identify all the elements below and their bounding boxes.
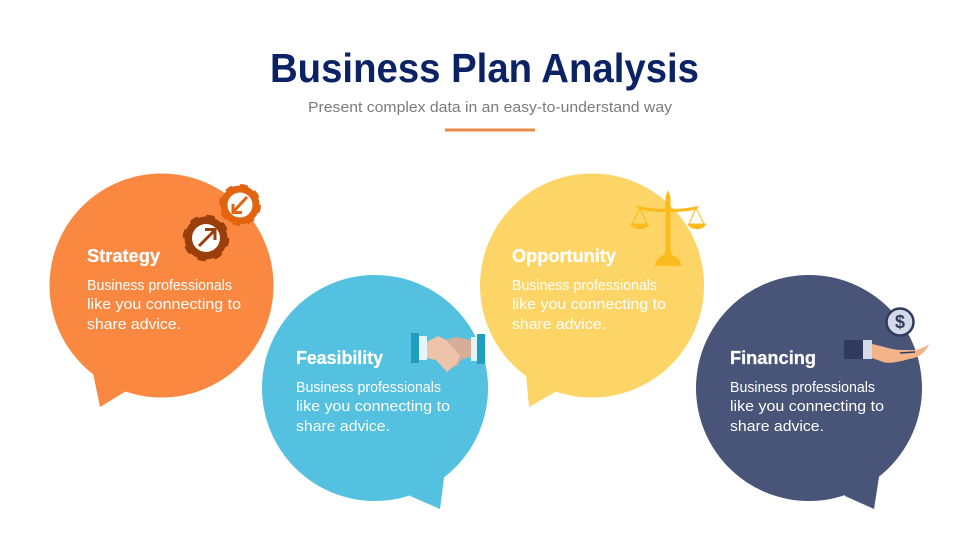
- panel: financing: [696, 275, 929, 509]
- text: strategy: [87, 278, 241, 333]
- icon: hand with coin: [844, 308, 929, 363]
- speech bubble: financing: [696, 275, 922, 509]
- title: Business Plan Analysis: [270, 45, 699, 91]
- text: feasibility: [296, 380, 450, 435]
- text: strategy: share advice.: [87, 317, 181, 333]
- icon: gears: [185, 186, 259, 259]
- text: feasibility: Business professionals: [296, 380, 441, 396]
- icon: hand with coin: $: [895, 312, 905, 332]
- subtitle: Present complex data in an easy-to-understand way: [308, 99, 673, 116]
- text: feasibility: share advice.: [296, 419, 390, 435]
- speech bubble: feasibility: [262, 275, 488, 509]
- text: financing: [730, 380, 884, 435]
- text: opportunity: Business professionals: [512, 278, 657, 294]
- speech bubble: opportunity: [480, 174, 704, 407]
- heading: opportunity: Opportunity: [512, 246, 616, 266]
- title underline: [445, 128, 535, 132]
- panel: feasibility: [262, 275, 488, 509]
- speech bubble: strategy: [50, 174, 274, 407]
- text: strategy: Business professionals: [87, 278, 232, 294]
- text: financing: Business professionals: [730, 380, 875, 396]
- text: opportunity: share advice.: [512, 317, 606, 333]
- heading: strategy: Strategy: [87, 246, 160, 266]
- text: financing: share advice.: [730, 419, 824, 435]
- icon: handshake: [411, 333, 485, 372]
- panel: opportunity: [480, 174, 706, 407]
- text: opportunity: [512, 278, 666, 333]
- heading: feasibility: Feasibility: [296, 348, 383, 368]
- text: strategy: like you connecting to: [87, 297, 241, 313]
- text: feasibility: like you connecting to: [296, 399, 450, 415]
- icon: scales: [630, 190, 706, 266]
- text: opportunity: like you connecting to: [512, 297, 666, 313]
- text: financing: like you connecting to: [730, 399, 884, 415]
- panel: strategy: [50, 174, 274, 407]
- heading: financing: Financing: [730, 348, 816, 368]
